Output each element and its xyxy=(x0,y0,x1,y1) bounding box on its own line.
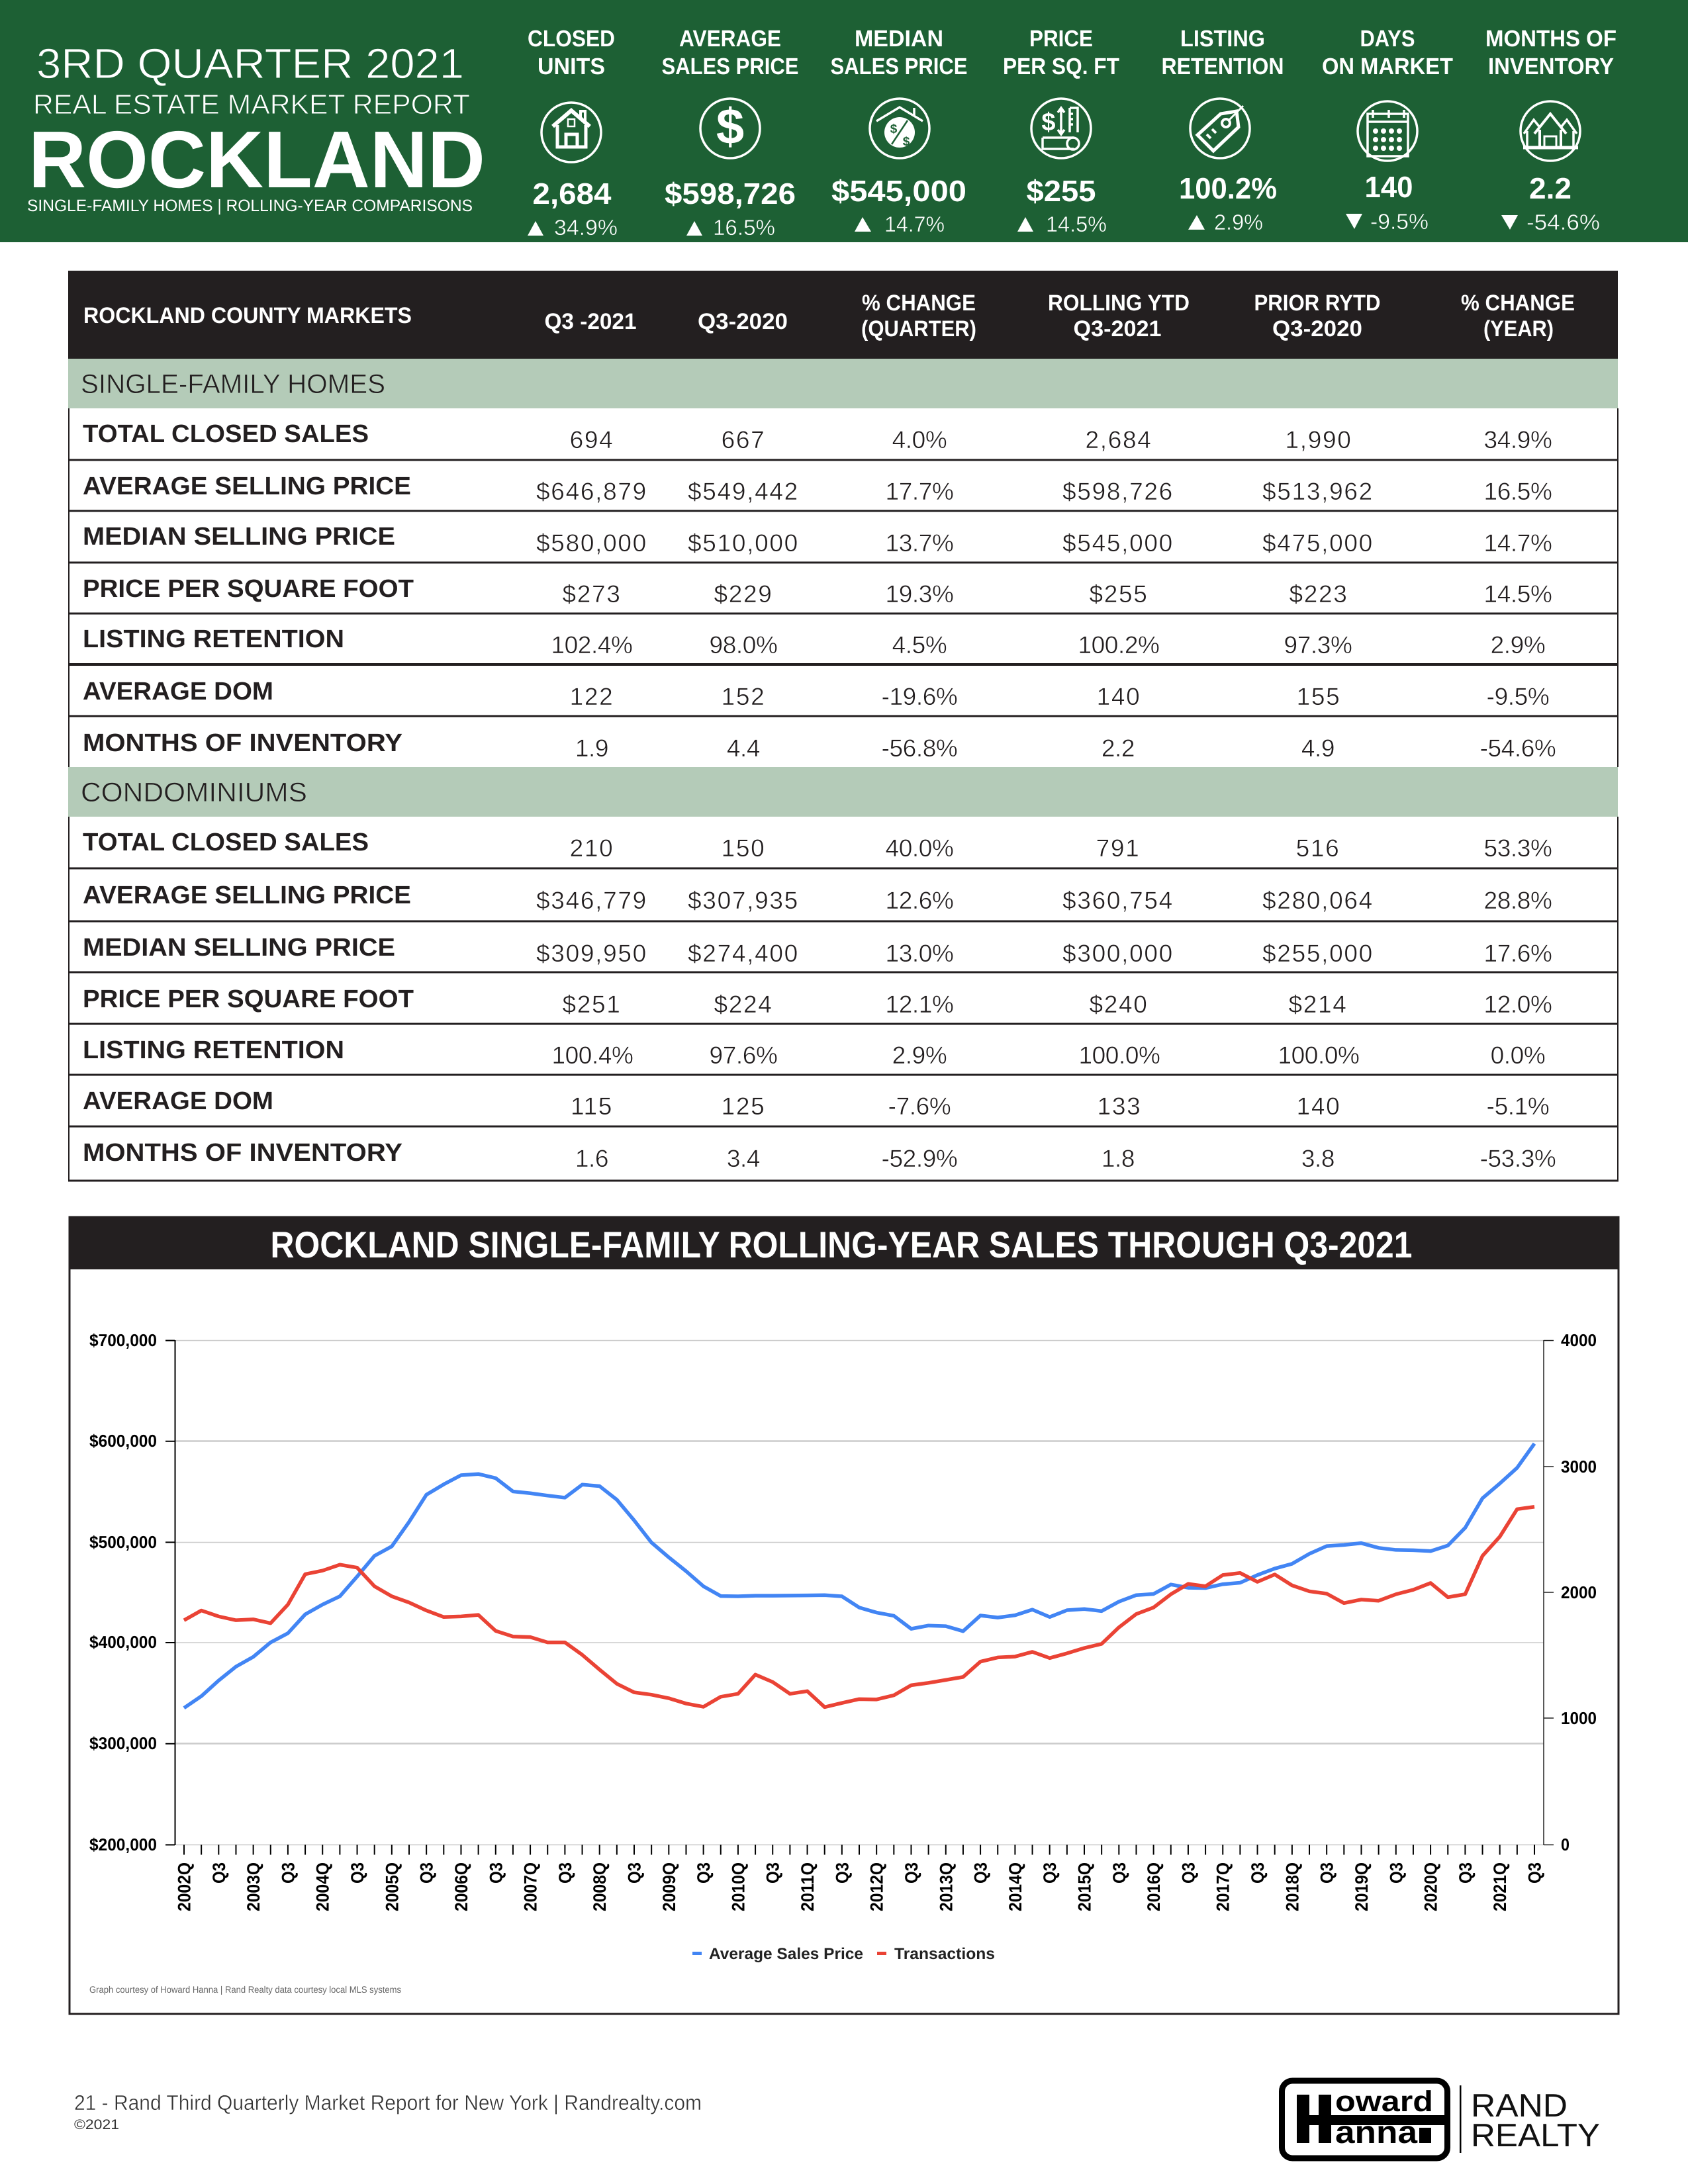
stat: listing retention: 100.2% xyxy=(1179,171,1277,205)
arrow: down xyxy=(1501,215,1518,230)
row: total closed sales: 53.3% xyxy=(1484,835,1552,862)
row: average dom: -9.5% xyxy=(1487,683,1549,710)
row: average dom xyxy=(83,1087,1549,1120)
row: listing retention: 98.0% xyxy=(710,631,777,659)
row: median selling price: $274,400 xyxy=(688,940,799,967)
line: average sales price xyxy=(184,1443,1534,1708)
row: total closed sales: 2,684 xyxy=(1085,426,1152,453)
stat: average sales price: SALES PRICE xyxy=(662,54,798,79)
x axis labels: Q3 xyxy=(278,1862,298,1884)
stat: closed units: UNITS xyxy=(538,54,605,79)
panel: market table xyxy=(68,271,1618,1181)
logo mark: Howard Hanna: anna xyxy=(1335,2115,1417,2150)
right axis xyxy=(1544,1330,1597,1854)
table header: Q3-2021 xyxy=(1074,316,1161,341)
x axis labels xyxy=(175,1862,1545,1911)
left axis: $200,000 xyxy=(89,1835,157,1854)
row: price per square foot: $214 xyxy=(1288,991,1348,1018)
table header: Q3-2020 xyxy=(1272,316,1362,341)
stat: average sales price: $598,726 xyxy=(665,177,796,210)
row: average dom: 140 xyxy=(1097,683,1141,710)
table header: PRIOR RYTD xyxy=(1254,291,1381,316)
row: listing retention: LISTING RETENTION xyxy=(83,1036,344,1064)
row: price per square foot: $273 xyxy=(562,580,622,608)
row: listing retention xyxy=(83,625,1545,659)
stat: closed units: 2,684 xyxy=(532,177,612,210)
left axis: $500,000 xyxy=(89,1532,157,1552)
row: months of inventory: -52.9% xyxy=(882,1145,957,1172)
x axis labels: 2016Q xyxy=(1144,1862,1164,1911)
row: average selling price: 16.5% xyxy=(1484,478,1552,505)
stat: average sales price xyxy=(662,26,798,240)
row: average selling price: $646,879 xyxy=(536,478,647,505)
row: listing retention: 102.4% xyxy=(551,631,633,659)
row: months of inventory: 4.9 xyxy=(1301,735,1335,762)
x axis labels: 2007Q xyxy=(521,1862,541,1911)
row: average dom: 152 xyxy=(722,683,765,710)
icon: dollar xyxy=(700,99,760,158)
table header xyxy=(68,271,1618,359)
subtitle: SINGLE-FAMILY HOMES | ROLLING-YEAR COMPARISONS xyxy=(27,197,473,215)
row: price per square foot: $240 xyxy=(1089,991,1149,1018)
row: average dom xyxy=(83,678,1549,710)
row: months of inventory: -56.8% xyxy=(882,735,957,762)
stat: median sales price: MEDIAN xyxy=(855,26,943,52)
left axis: $400,000 xyxy=(89,1632,157,1652)
row: median selling price: $475,000 xyxy=(1262,529,1374,557)
row: average dom: 115 xyxy=(571,1093,613,1120)
title: county: ROCKLAND xyxy=(28,114,485,205)
row: median selling price: $255,000 xyxy=(1262,940,1374,967)
icon: calendar xyxy=(1358,101,1417,161)
x axis ticks xyxy=(183,1845,1536,1854)
table header: ROCKLAND COUNTY MARKETS xyxy=(83,303,412,328)
row: total closed sales: 1,990 xyxy=(1285,426,1352,453)
arrow: down xyxy=(1346,214,1362,229)
row: average dom: AVERAGE DOM xyxy=(83,678,273,705)
row: median selling price: 13.0% xyxy=(886,940,953,967)
row: total closed sales: 791 xyxy=(1096,835,1140,862)
row: average dom: 140 xyxy=(1297,1093,1340,1120)
row: months of inventory xyxy=(83,729,1556,762)
stat: closed units: CLOSED xyxy=(528,26,615,52)
icon: price and tape measure xyxy=(1031,99,1091,158)
section band: single-family homes xyxy=(68,359,1618,408)
x axis labels: 2009Q xyxy=(659,1862,679,1911)
x axis labels: 2004Q xyxy=(313,1862,333,1911)
row: price per square foot xyxy=(83,575,1552,608)
x axis labels: 2014Q xyxy=(1006,1862,1025,1911)
row: total closed sales: 4.0% xyxy=(892,426,947,453)
stat: median sales price: SALES PRICE xyxy=(830,54,968,79)
row: median selling price xyxy=(83,523,1552,557)
left axis: $300,000 xyxy=(89,1733,157,1753)
icon: house with split dollar: $ xyxy=(903,135,910,149)
row: average dom: 125 xyxy=(722,1093,765,1120)
x axis labels: Q3 xyxy=(417,1862,437,1884)
stat: days on market xyxy=(1322,26,1453,234)
stat: listing retention: 2.9% xyxy=(1214,210,1263,234)
row: median selling price: $300,000 xyxy=(1062,940,1174,967)
stat: days on market: ON MARKET xyxy=(1322,54,1453,79)
stat: months of inventory: 2.2 xyxy=(1529,171,1571,205)
header banner xyxy=(0,0,1688,242)
logo wordmark: Rand Realty: RAND xyxy=(1471,2088,1568,2124)
row: listing retention: 100.0% xyxy=(1278,1042,1360,1069)
row: price per square foot: PRICE PER SQUARE FOOT xyxy=(83,575,414,603)
rows: single-family homes xyxy=(83,420,1556,762)
row: total closed sales: 694 xyxy=(570,426,614,453)
row: months of inventory: MONTHS OF INVENTORY xyxy=(83,729,402,757)
icon: dollar: $ xyxy=(716,99,744,155)
stat: average sales price: 16.5% xyxy=(713,215,775,240)
chart heading: ROCKLAND SINGLE-FAMILY ROLLING-YEAR SALES THROUGH Q3-2021 xyxy=(270,1224,1413,1265)
row: listing retention: 100.2% xyxy=(1078,631,1160,659)
x axis labels: Q3 xyxy=(1317,1862,1337,1884)
stat: price per square foot xyxy=(1003,26,1119,236)
row: average selling price: $280,064 xyxy=(1262,887,1374,914)
row: months of inventory: MONTHS OF INVENTORY xyxy=(83,1139,402,1167)
row: median selling price: 14.7% xyxy=(1484,529,1552,557)
row: total closed sales xyxy=(83,420,1552,453)
x axis labels: Q3 xyxy=(1386,1862,1406,1884)
row: total closed sales xyxy=(83,829,1552,862)
row: total closed sales: TOTAL CLOSED SALES xyxy=(83,829,369,856)
stat: median sales price: 14.7% xyxy=(884,212,945,236)
row: price per square foot: $255 xyxy=(1089,580,1149,608)
arrow: up xyxy=(528,221,543,236)
row: price per square foot xyxy=(83,985,1552,1018)
stat: months of inventory: MONTHS OF xyxy=(1485,26,1617,52)
row: average selling price: $549,442 xyxy=(688,478,799,505)
x axis labels: 2021Q xyxy=(1490,1862,1510,1911)
row: average selling price: $307,935 xyxy=(688,887,799,914)
row: months of inventory: 1.6 xyxy=(575,1145,608,1172)
x axis labels: 2018Q xyxy=(1282,1862,1302,1911)
arrow: up xyxy=(855,217,871,232)
row: median selling price: $309,950 xyxy=(536,940,647,967)
x axis labels: Q3 xyxy=(1040,1862,1060,1884)
row: median selling price xyxy=(83,934,1552,967)
title: report name: REAL ESTATE MARKET REPORT xyxy=(33,89,470,120)
row: listing retention: 100.0% xyxy=(1078,1042,1160,1069)
row: price per square foot: 12.1% xyxy=(886,991,953,1018)
row: months of inventory: -53.3% xyxy=(1480,1145,1556,1172)
x axis labels: Q3 xyxy=(1456,1862,1476,1884)
row: average selling price: 12.6% xyxy=(886,887,953,914)
table header: (QUARTER) xyxy=(861,316,976,341)
x axis labels: Q3 xyxy=(555,1862,575,1884)
table header: % CHANGE xyxy=(862,291,976,316)
icon: neighborhood houses xyxy=(1521,101,1580,161)
stat: price per square foot: PER SQ. FT xyxy=(1003,54,1119,79)
stat: listing retention: RETENTION xyxy=(1161,54,1284,79)
table header: (YEAR) xyxy=(1483,316,1554,341)
logo wordmark: Rand Realty: REALTY xyxy=(1471,2118,1600,2154)
arrow: up xyxy=(1017,217,1033,232)
footer text: ©2021 xyxy=(74,2117,119,2132)
row: months of inventory xyxy=(83,1139,1556,1172)
stat: days on market: DAYS xyxy=(1360,26,1415,52)
right axis: 4000 xyxy=(1561,1330,1597,1350)
row: median selling price: $545,000 xyxy=(1062,529,1174,557)
right axis: 2000 xyxy=(1561,1582,1597,1602)
row: total closed sales: 210 xyxy=(570,835,614,862)
row: median selling price: $510,000 xyxy=(688,529,799,557)
x axis labels: Q3 xyxy=(1178,1862,1198,1884)
row: median selling price: $580,000 xyxy=(536,529,647,557)
row: months of inventory: 1.9 xyxy=(575,735,608,762)
x axis labels: 2005Q xyxy=(382,1862,402,1911)
row: price per square foot: $224 xyxy=(714,991,773,1018)
stat: listing retention: LISTING xyxy=(1180,26,1265,52)
line: transactions xyxy=(184,1507,1534,1707)
x axis labels: 2010Q xyxy=(728,1862,748,1911)
stat: median sales price: $545,000 xyxy=(831,174,966,208)
row: months of inventory: 2.2 xyxy=(1102,735,1135,762)
right axis: 1000 xyxy=(1561,1708,1597,1728)
row: listing retention: 0.0% xyxy=(1491,1042,1545,1069)
row: price per square foot: 14.5% xyxy=(1484,580,1552,608)
x axis labels: 2011Q xyxy=(798,1862,818,1911)
x axis labels: Q3 xyxy=(486,1862,506,1884)
right axis: 3000 xyxy=(1561,1457,1597,1477)
row: months of inventory: 3.8 xyxy=(1301,1145,1335,1172)
x axis labels: Q3 xyxy=(763,1862,783,1884)
x axis labels: 2012Q xyxy=(867,1862,887,1911)
row: average dom: -7.6% xyxy=(888,1093,951,1120)
stat: price per square foot: $255 xyxy=(1026,174,1096,208)
row: median selling price: 17.6% xyxy=(1484,940,1552,967)
icon: price and tape measure: $ xyxy=(1041,109,1056,136)
arrow: up xyxy=(686,221,702,236)
row: average selling price xyxy=(83,882,1552,914)
row: listing retention: LISTING RETENTION xyxy=(83,625,344,653)
row: listing retention: 97.3% xyxy=(1284,631,1352,659)
row: total closed sales: TOTAL CLOSED SALES xyxy=(83,420,369,448)
stat: days on market: -9.5% xyxy=(1370,209,1429,234)
row: total closed sales: 667 xyxy=(722,426,765,453)
x axis labels: Q3 xyxy=(1248,1862,1268,1884)
row: price per square foot: 12.0% xyxy=(1484,991,1552,1018)
row: listing retention: 2.9% xyxy=(892,1042,947,1069)
row: average dom: 133 xyxy=(1098,1093,1141,1120)
row: months of inventory: 3.4 xyxy=(727,1145,760,1172)
row: average selling price: $598,726 xyxy=(1062,478,1174,505)
table header: Q3 -2021 xyxy=(544,309,637,334)
title: quarter: 3RD QUARTER 2021 xyxy=(36,40,464,87)
chart source note: Graph courtesy of Howard Hanna | Rand Realty data courtesy local MLS systems xyxy=(89,1984,401,1995)
row: months of inventory: 1.8 xyxy=(1102,1145,1135,1172)
row: average dom: 155 xyxy=(1297,683,1340,710)
row: total closed sales: 40.0% xyxy=(886,835,953,862)
x axis labels: Q3 xyxy=(832,1862,852,1884)
row: listing retention: 4.5% xyxy=(892,631,947,659)
stat: price per square foot: PRICE xyxy=(1029,26,1093,52)
chart legend: Transactions xyxy=(894,1945,995,1963)
table header: Q3-2020 xyxy=(698,309,788,334)
left axis xyxy=(89,1330,175,1854)
row: price per square foot: $251 xyxy=(562,991,622,1018)
x axis labels: 2015Q xyxy=(1075,1862,1095,1911)
row: median selling price: 13.7% xyxy=(886,529,953,557)
logo mark: Howard Hanna: oward xyxy=(1335,2085,1433,2118)
x axis labels: 2020Q xyxy=(1421,1862,1441,1911)
stat: months of inventory: INVENTORY xyxy=(1488,54,1614,79)
section band: condominiums: CONDOMINIUMS xyxy=(81,777,307,807)
row: months of inventory: 4.4 xyxy=(727,735,760,762)
icon: price tag xyxy=(1190,99,1250,158)
row: average dom: -5.1% xyxy=(1487,1093,1549,1120)
x axis labels: Q3 xyxy=(694,1862,714,1884)
row: total closed sales: 516 xyxy=(1296,835,1340,862)
x axis labels: 2003Q xyxy=(244,1862,263,1911)
chart legend xyxy=(692,1945,995,1963)
panel: rolling-year sales chart xyxy=(69,1217,1618,2014)
row: average selling price: 17.7% xyxy=(886,478,953,505)
logo wordmark: Rand Realty xyxy=(1471,2088,1600,2154)
x axis labels: 2013Q xyxy=(936,1862,956,1911)
x axis labels: Q3 xyxy=(1109,1862,1129,1884)
x axis labels: 2008Q xyxy=(590,1862,610,1911)
row: average dom: AVERAGE DOM xyxy=(83,1087,273,1115)
row: average selling price: AVERAGE SELLING PRICE xyxy=(83,882,411,909)
row: price per square foot: $223 xyxy=(1289,580,1348,608)
line chart xyxy=(89,1330,1597,1963)
row: average dom: -19.6% xyxy=(882,683,957,710)
stat: closed units xyxy=(528,26,618,240)
row: average selling price xyxy=(83,473,1552,505)
row: average dom: 122 xyxy=(570,683,614,710)
row: total closed sales: 150 xyxy=(722,835,765,862)
stat: closed units: 34.9% xyxy=(554,215,618,240)
footer text xyxy=(74,2091,702,2132)
stat: months of inventory: -54.6% xyxy=(1526,210,1600,234)
x axis labels: Q3 xyxy=(348,1862,367,1884)
row: average selling price: 28.8% xyxy=(1484,887,1552,914)
row: median selling price: MEDIAN SELLING PRICE xyxy=(83,934,395,962)
row: listing retention xyxy=(83,1036,1545,1069)
x axis labels: 2019Q xyxy=(1352,1862,1372,1911)
table header: ROLLING YTD xyxy=(1048,291,1190,316)
row: average selling price: $346,779 xyxy=(536,887,647,914)
right axis: 0 xyxy=(1561,1835,1570,1854)
x axis labels: 2002Q xyxy=(175,1862,195,1911)
row: average selling price: AVERAGE SELLING PRICE xyxy=(83,473,411,500)
icon: house with split dollar xyxy=(870,99,929,158)
stat: price per square foot: 14.5% xyxy=(1046,212,1107,236)
row: listing retention: 97.6% xyxy=(710,1042,777,1069)
footer text: 21 - Rand Third Quarterly Market Report for New York | Randrealty.com xyxy=(74,2091,702,2115)
stat: days on market: 140 xyxy=(1365,170,1413,204)
logo mark: Howard Hanna xyxy=(1282,2081,1447,2158)
x axis labels: 2006Q xyxy=(451,1862,471,1911)
report title block xyxy=(27,40,485,215)
row: average selling price: $360,754 xyxy=(1062,887,1174,914)
section band: condominiums xyxy=(68,767,1618,817)
x axis labels: Q3 xyxy=(1525,1862,1545,1884)
x axis labels: Q3 xyxy=(902,1862,921,1884)
row: listing retention: 2.9% xyxy=(1491,631,1545,659)
icon: house with split dollar: $ xyxy=(890,122,898,136)
logo: Howard Hanna Rand Realty xyxy=(1282,2081,1600,2158)
stat: listing retention xyxy=(1161,26,1284,234)
row: price per square foot: 19.3% xyxy=(886,580,953,608)
x axis labels: 2017Q xyxy=(1213,1862,1233,1911)
row: median selling price: MEDIAN SELLING PRICE xyxy=(83,523,395,551)
row: price per square foot: PRICE PER SQUARE FOOT xyxy=(83,985,414,1013)
section band: single-family homes: SINGLE-FAMILY HOMES xyxy=(81,369,385,399)
chart heading xyxy=(69,1217,1618,1269)
row: months of inventory: -54.6% xyxy=(1480,735,1556,762)
stat: median sales price xyxy=(830,26,968,236)
row: listing retention: 100.4% xyxy=(551,1042,633,1069)
left axis: $700,000 xyxy=(89,1330,157,1350)
rows: condominiums xyxy=(83,829,1556,1172)
row: price per square foot: $229 xyxy=(714,580,773,608)
stat: average sales price: AVERAGE xyxy=(679,26,781,52)
x axis labels: Q3 xyxy=(625,1862,645,1884)
x axis labels: Q3 xyxy=(209,1862,229,1884)
chart legend: Average Sales Price xyxy=(709,1945,863,1963)
stat: months of inventory xyxy=(1485,26,1617,234)
left axis: $600,000 xyxy=(89,1431,157,1451)
table header: % CHANGE xyxy=(1461,291,1575,316)
row: total closed sales: 34.9% xyxy=(1484,426,1552,453)
icon: house xyxy=(541,103,601,162)
x axis labels: Q3 xyxy=(971,1862,991,1884)
row: average selling price: $513,962 xyxy=(1262,478,1374,505)
arrow: up xyxy=(1188,215,1205,230)
